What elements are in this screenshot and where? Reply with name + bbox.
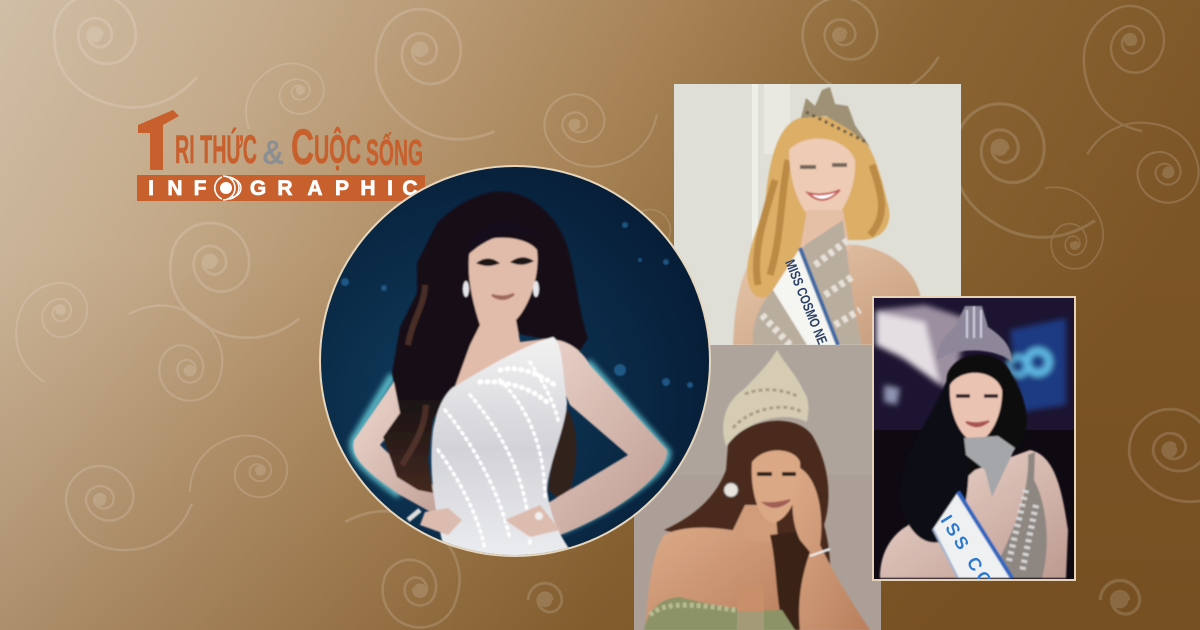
crown <box>801 87 870 147</box>
dress <box>644 597 795 630</box>
long hair lock <box>769 532 809 630</box>
sash <box>933 492 1012 578</box>
glow outline on arms <box>353 362 667 530</box>
face <box>752 450 800 523</box>
sash <box>773 248 838 345</box>
logo wordmark: Cuộc initial: C <box>291 119 314 175</box>
sash text: MISS COSMO NE <box>782 257 831 347</box>
circle frame <box>319 165 711 557</box>
body <box>880 450 1068 578</box>
photo: top contestant, blonde with crown <box>674 84 961 347</box>
face <box>950 373 1002 443</box>
mosaic censor block <box>737 606 764 611</box>
bracelet <box>810 549 830 556</box>
photo: right contestant, dark hair with tall crown <box>872 296 1076 590</box>
hair back <box>664 420 831 564</box>
crown <box>723 350 808 446</box>
logo: Tri Thức & Cuộc Sống Infographic: RI THỨC <box>175 126 257 172</box>
shoulders <box>733 245 921 345</box>
right hair lock <box>548 405 576 505</box>
sash text: ISS CO <box>937 512 996 590</box>
pearls <box>438 362 558 550</box>
logo banner text: INF: INF <box>148 177 207 200</box>
blurred stage lights <box>876 305 965 395</box>
starry bokeh <box>341 222 693 388</box>
left arm <box>352 380 437 512</box>
raised arm and hand <box>792 468 870 630</box>
left hand <box>420 508 462 535</box>
dress sparkle <box>1000 452 1048 578</box>
photo: main contestant in circular frame <box>319 165 711 560</box>
right arm and shoulder <box>505 340 667 535</box>
logo banner <box>137 175 425 201</box>
logo wordmark: Cuộc: UỘC <box>314 126 361 172</box>
face and neck <box>453 238 553 392</box>
hair front <box>900 380 972 543</box>
earring <box>724 483 738 497</box>
hair <box>747 116 889 298</box>
hair back <box>383 192 588 493</box>
right hand and ring <box>505 505 560 537</box>
hair highlights <box>402 285 426 465</box>
logo banner icon: concentric O <box>215 176 241 200</box>
dress <box>431 337 570 560</box>
bracelet <box>408 510 420 520</box>
hair back <box>946 354 1028 476</box>
earrings <box>463 281 469 297</box>
lower dark dress <box>960 545 1010 578</box>
logo wordmark: Sống: SỐNG <box>366 131 423 173</box>
photo: bottom contestant, brunette with large crown <box>634 345 881 630</box>
neck and necklace <box>964 436 1015 497</box>
logo wordmark: ampersand: & <box>262 134 284 172</box>
dress <box>753 220 862 345</box>
face <box>789 139 855 224</box>
neck <box>732 505 778 542</box>
logo: Tri Thức & Cuộc Sống Infographic <box>137 110 425 201</box>
logo icon: T shape <box>138 110 179 170</box>
neck and chest <box>800 210 850 250</box>
forehead hair parting <box>465 222 545 258</box>
crown <box>937 306 1012 362</box>
logo banner text: GRAPHIC: GRAPHIC <box>250 177 418 200</box>
shoulders and torso <box>645 526 781 623</box>
